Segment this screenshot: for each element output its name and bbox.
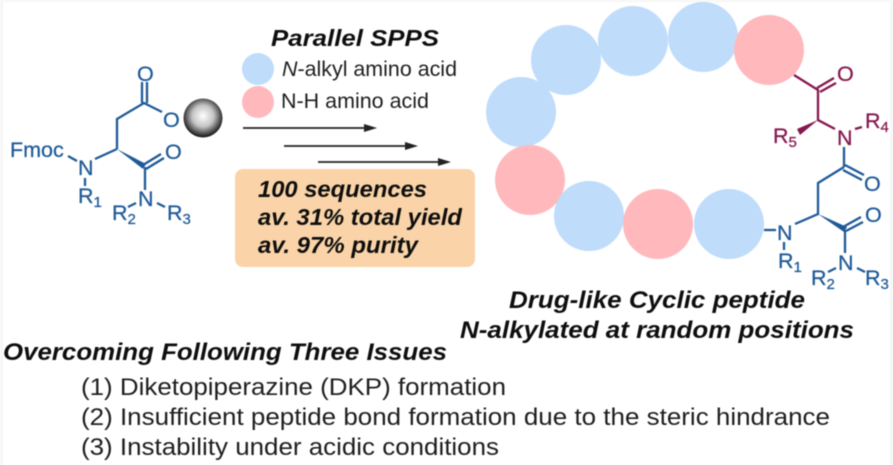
- caption: drug-like cyclic peptide: [460, 287, 854, 344]
- molecule: blue residue: [764, 147, 889, 293]
- molecule: blue residue: 1: [794, 259, 802, 276]
- callout: synthesis results: av. 31% total yield: [258, 204, 463, 230]
- molecule: blue residue: R: [865, 266, 881, 290]
- legend: N-alkyl amino acid: N-alkyl amino acid: [282, 58, 457, 81]
- molecule: blue residue: R: [811, 266, 827, 290]
- molecule: maroon residue: 4: [881, 119, 889, 136]
- caption: drug-like cyclic peptide: N-alkylated at random positions: [460, 317, 854, 344]
- molecule: blue residue: O: [864, 172, 881, 196]
- text block: list of issues: (3) Instability under acidic conditions: [81, 434, 499, 461]
- arrow: bottom: [318, 158, 451, 166]
- molecule: Fmoc resin-bound building block: N: [78, 156, 94, 180]
- callout: synthesis results: av. 97% purity: [258, 232, 419, 258]
- callout: synthesis results: 100 sequences: [258, 176, 427, 202]
- text block: list of issues: [81, 374, 830, 461]
- legend: N-H amino acid: [242, 86, 429, 118]
- molecule: blue residue: O: [865, 203, 882, 227]
- arrow: top: [243, 124, 377, 132]
- molecule: Fmoc resin-bound building block: O: [163, 108, 180, 132]
- molecule: maroon residue: R: [865, 109, 881, 133]
- molecule: maroon residue: [773, 62, 889, 151]
- molecule: maroon residue: N: [837, 126, 853, 150]
- heading: overcoming three issues: Overcoming Following Three Issues: [3, 339, 447, 366]
- molecule: Fmoc resin-bound building block: R: [78, 184, 94, 208]
- molecule: blue residue: 3: [881, 276, 889, 293]
- molecule: maroon residue: 5: [789, 134, 797, 151]
- molecule: Fmoc resin-bound building block: R: [112, 201, 128, 225]
- text block: list of issues: (2) Insufficient peptide bond formation due to the steric hindrance: [81, 404, 830, 431]
- molecule: Fmoc resin-bound building block: O: [137, 62, 154, 86]
- molecule: Fmoc resin-bound building block: O: [165, 140, 182, 164]
- molecule: Fmoc resin-bound building block: R: [167, 201, 183, 225]
- legend: N-alkyl amino acid: [242, 53, 457, 85]
- molecule: blue residue: R: [778, 249, 794, 273]
- molecule: blue residue: N: [777, 221, 793, 245]
- molecule: maroon residue: O: [837, 62, 854, 86]
- heading: Parallel SPPS: Parallel SPPS: [271, 25, 439, 51]
- arrow: middle: [284, 142, 418, 150]
- molecule: Fmoc resin-bound building block: 2: [128, 211, 136, 228]
- callout: synthesis results: [235, 169, 475, 267]
- molecule: Fmoc resin-bound building block: 3: [183, 211, 191, 228]
- caption: drug-like cyclic peptide: Drug-like Cyclic peptide: [509, 287, 805, 314]
- text block: list of issues: (1) Diketopiperazine (DKP) formation: [81, 374, 506, 401]
- molecule: blue residue: N: [838, 251, 854, 275]
- diagram: cyclic peptide bead ring: [486, 2, 804, 259]
- molecule: blue residue: 2: [827, 276, 835, 293]
- molecule: Fmoc resin-bound building block: N: [138, 187, 154, 211]
- molecule: Fmoc resin-bound building block: Fmoc: [10, 138, 64, 162]
- legend: N-H amino acid: N-H amino acid: [281, 90, 429, 113]
- icon: resin bead: [184, 98, 222, 138]
- molecule: Fmoc resin-bound building block: 1: [94, 194, 102, 211]
- molecule: Fmoc resin-bound building block: [10, 62, 191, 228]
- molecule: maroon residue: R: [773, 124, 789, 148]
